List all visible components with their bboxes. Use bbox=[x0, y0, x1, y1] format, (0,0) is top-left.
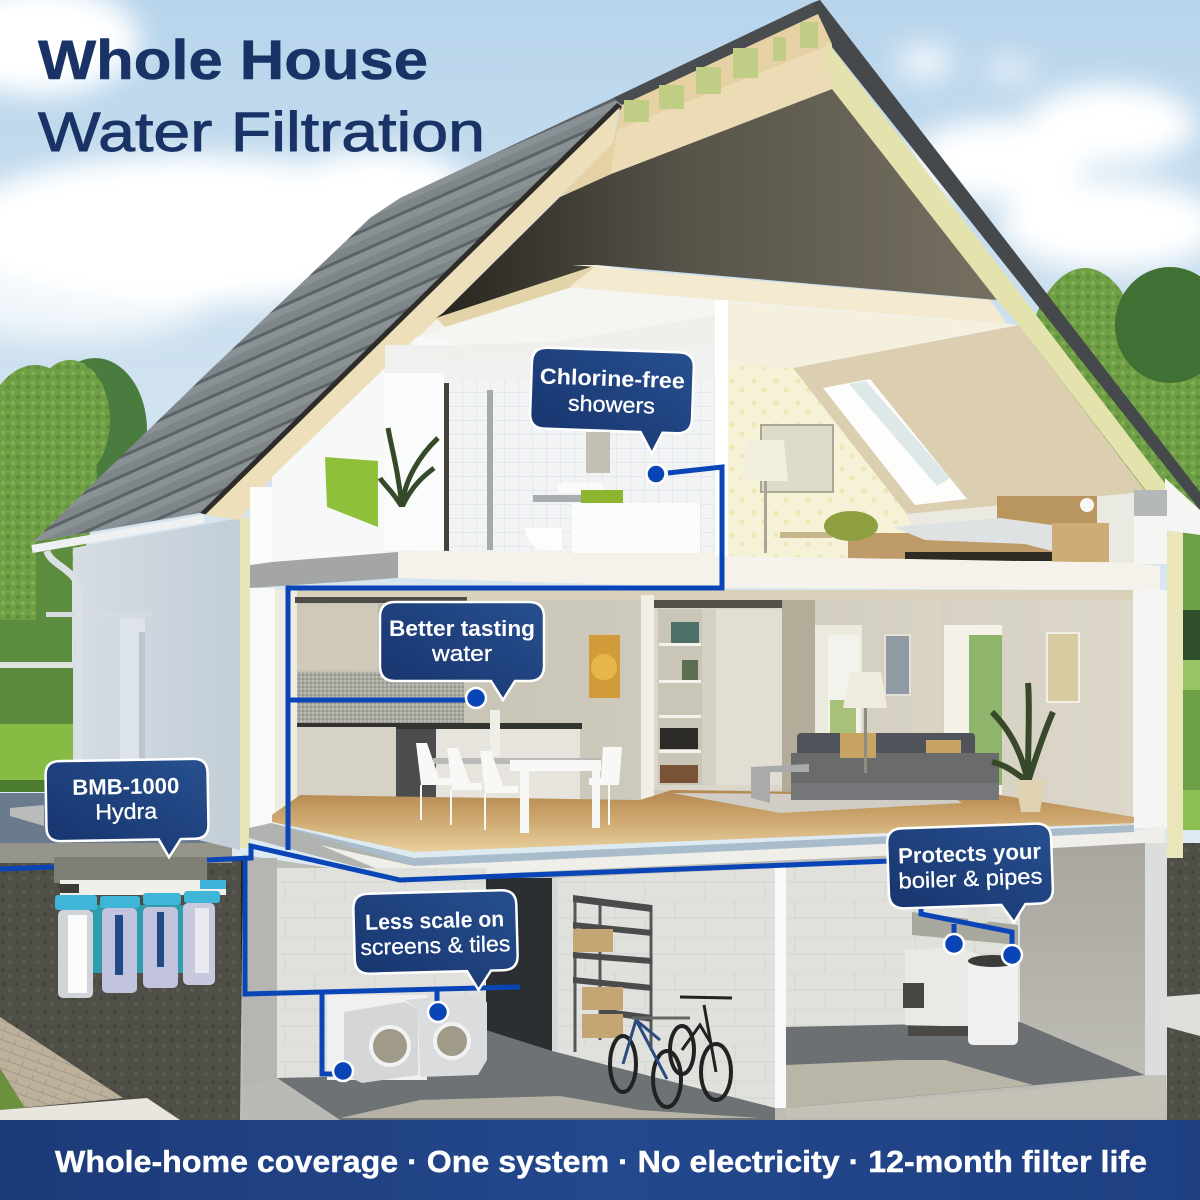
ceiling left bbox=[417, 288, 715, 350]
callout: protects your boiler and pipes: Protects your bbox=[898, 839, 1042, 868]
boiler and water tank bbox=[903, 905, 1018, 1045]
sloped ceiling bbox=[793, 325, 1146, 514]
callout: chlorine-free showers: showers bbox=[568, 390, 655, 419]
callout: BMB-1000 Hydra bbox=[45, 759, 209, 859]
bottom benefits banner: Whole-home coverage · One system · No electricity · 12-month filter life bbox=[55, 1144, 1147, 1179]
downpipe bbox=[47, 551, 78, 800]
middle floor slab bbox=[249, 823, 1164, 878]
washing machines bbox=[327, 994, 487, 1083]
gutter bbox=[32, 519, 204, 549]
house interior base bbox=[272, 265, 1167, 565]
pipe endpoint dots bbox=[333, 464, 1022, 1081]
water filter unit bbox=[54, 857, 226, 998]
right rafter insulation bbox=[826, 40, 1170, 492]
closet and shelves bbox=[654, 600, 782, 790]
callout: BMB-1000 Hydra: Hydra bbox=[95, 798, 158, 825]
callout: BMB-1000 Hydra: BMB-1000 bbox=[72, 773, 179, 800]
callout: better tasting water: water bbox=[431, 641, 492, 666]
callout: better tasting water bbox=[380, 602, 544, 700]
bottom benefits banner bbox=[0, 1120, 1200, 1200]
callout: chlorine-free showers: Chlorine-free bbox=[540, 363, 685, 394]
rafter left bbox=[205, 107, 620, 520]
upper floor rooms bbox=[272, 265, 1146, 565]
roof bbox=[32, 0, 1200, 549]
plant upstairs bbox=[380, 428, 438, 550]
basement bbox=[240, 478, 1200, 1120]
callout: less scale on screens and tiles: Less scale on bbox=[365, 906, 505, 935]
bicycles bbox=[610, 997, 732, 1107]
side annex wall bbox=[46, 518, 240, 850]
callout: protects your boiler and pipes: boiler & pipes bbox=[898, 863, 1043, 893]
skylight bbox=[823, 379, 967, 505]
attic interior bbox=[436, 14, 1170, 492]
upper floor slab bbox=[250, 487, 1160, 590]
potted plant bbox=[992, 683, 1053, 812]
callout: less scale on screens and tiles: screens & tiles bbox=[360, 931, 511, 960]
callout: less scale on screens and tiles bbox=[353, 890, 519, 993]
joists bbox=[436, 265, 597, 327]
floors bbox=[277, 1030, 775, 1120]
callout: protects your boiler and pipes bbox=[887, 823, 1054, 927]
title: Whole House bbox=[38, 28, 428, 91]
bedroom wallpaper bbox=[728, 366, 925, 560]
storage shelves bbox=[573, 895, 652, 1052]
sofa bbox=[751, 733, 999, 803]
water pipes bbox=[0, 467, 1012, 1074]
floor lamp bbox=[843, 672, 887, 773]
callout: chlorine-free showers bbox=[529, 347, 694, 455]
callout: better tasting water: Better tasting bbox=[389, 616, 535, 641]
ridge beam bbox=[560, 14, 832, 197]
middle floor rooms bbox=[240, 518, 1167, 852]
trees and garden bbox=[0, 267, 1200, 830]
title: Water Filtration bbox=[38, 100, 485, 163]
title bbox=[38, 28, 485, 163]
ground and soil bbox=[0, 793, 1200, 1120]
dining table and chairs bbox=[416, 710, 622, 833]
green towel panel bbox=[325, 457, 378, 527]
bedroom ceiling bbox=[728, 303, 1007, 368]
